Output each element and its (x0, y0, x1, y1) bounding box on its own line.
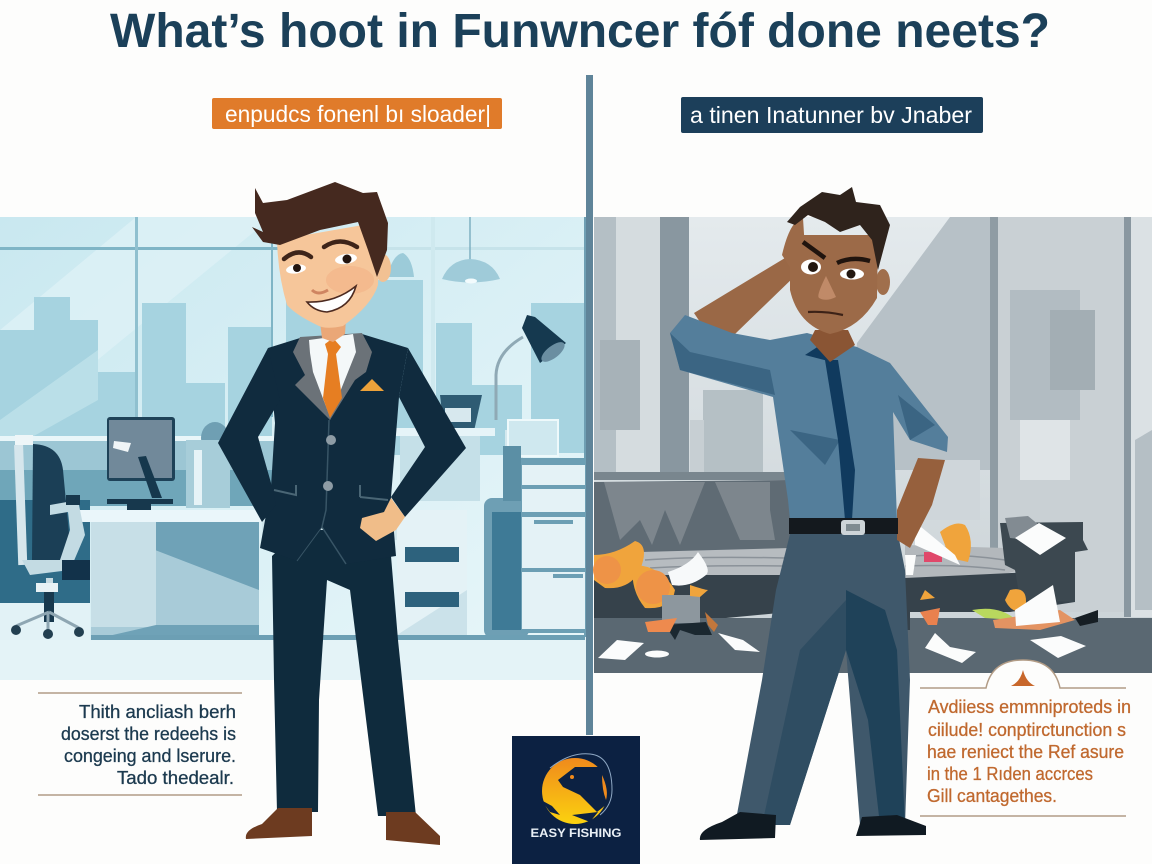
text block: left caption: doserst the redeehs is (61, 724, 236, 744)
blue shirt (670, 315, 948, 520)
city skyline left (0, 280, 584, 455)
hand on hip (360, 498, 405, 541)
floor (594, 618, 1152, 673)
nose (818, 276, 836, 300)
jacket (218, 334, 466, 564)
text block: right caption with arch (920, 660, 1131, 816)
text block: right caption with arch: Avdiiess emmniproteds in (928, 697, 1131, 717)
desk (80, 510, 270, 640)
shoes (700, 812, 926, 840)
navy label badge: a tinen Inatunner bv Jnaber (690, 102, 972, 128)
icon: warning triangle (1011, 670, 1035, 686)
desk items back right (395, 395, 558, 505)
ruined skyline (600, 290, 1095, 520)
shoes (246, 808, 440, 845)
icon: fishing emblem (541, 754, 612, 824)
divider line (586, 75, 593, 735)
desk drawers (262, 510, 467, 635)
panel: bright modern office scene (0, 217, 588, 680)
computer monitor (107, 417, 175, 510)
title: What’s hoot in Funwncer fóf done neets? (110, 5, 1050, 58)
desk lamp (496, 315, 568, 420)
text block: right caption with arch: Gill cantagethes. (927, 786, 1057, 806)
window frames (0, 217, 588, 637)
belt with buckle (789, 518, 898, 535)
text block: right caption with arch: in the 1 Rıden accrces (927, 764, 1093, 784)
mouth (808, 312, 843, 315)
jacket buttons (323, 435, 336, 491)
trousers (735, 534, 910, 825)
head (252, 182, 391, 328)
text block: right caption with arch: hae reniect the Ref asure (927, 742, 1124, 762)
character: confident businessman in suit (218, 182, 466, 845)
neck (320, 319, 346, 342)
hand in hair (782, 218, 805, 272)
text block: left caption: congeing and lserure. (64, 746, 236, 766)
shirt and lapels (293, 333, 372, 420)
pocket square (360, 379, 384, 391)
neck (810, 330, 855, 362)
logo wordmark: EASY FISHING (530, 828, 622, 840)
filing cabinets (484, 446, 585, 638)
text block: left caption: Thith ancliash berh (79, 702, 236, 722)
trousers (272, 530, 416, 816)
smile (307, 286, 356, 312)
logo: Easy Fishing (512, 736, 640, 864)
text block: left caption: Tado thedealr. (117, 768, 234, 788)
orange label badge: enpudcs fonenl bı sloader| (225, 101, 491, 127)
eyebrows (284, 242, 357, 259)
forearm raised to head (694, 258, 797, 337)
eyes (285, 253, 358, 275)
ceiling lamps (387, 217, 500, 284)
head (782, 187, 890, 334)
eyes (801, 260, 864, 280)
eyebrows (803, 242, 870, 263)
navy label badge (681, 97, 983, 133)
orange tie (323, 338, 342, 418)
nose (312, 290, 328, 293)
wrecked sofa (594, 480, 1088, 628)
office chair (11, 435, 90, 639)
scattered papers (598, 522, 1086, 663)
text block: right caption with arch: ciilude! conptirctunction s (928, 720, 1126, 740)
hair (252, 182, 388, 277)
panel: messy grey office scene (593, 217, 1152, 673)
plant and vases (186, 422, 230, 508)
orange characters and debris (593, 524, 1098, 640)
hair (787, 187, 890, 270)
text block: left caption (38, 693, 242, 795)
forearm right on hip (897, 458, 945, 548)
character: stressed man scratching head (670, 187, 948, 840)
